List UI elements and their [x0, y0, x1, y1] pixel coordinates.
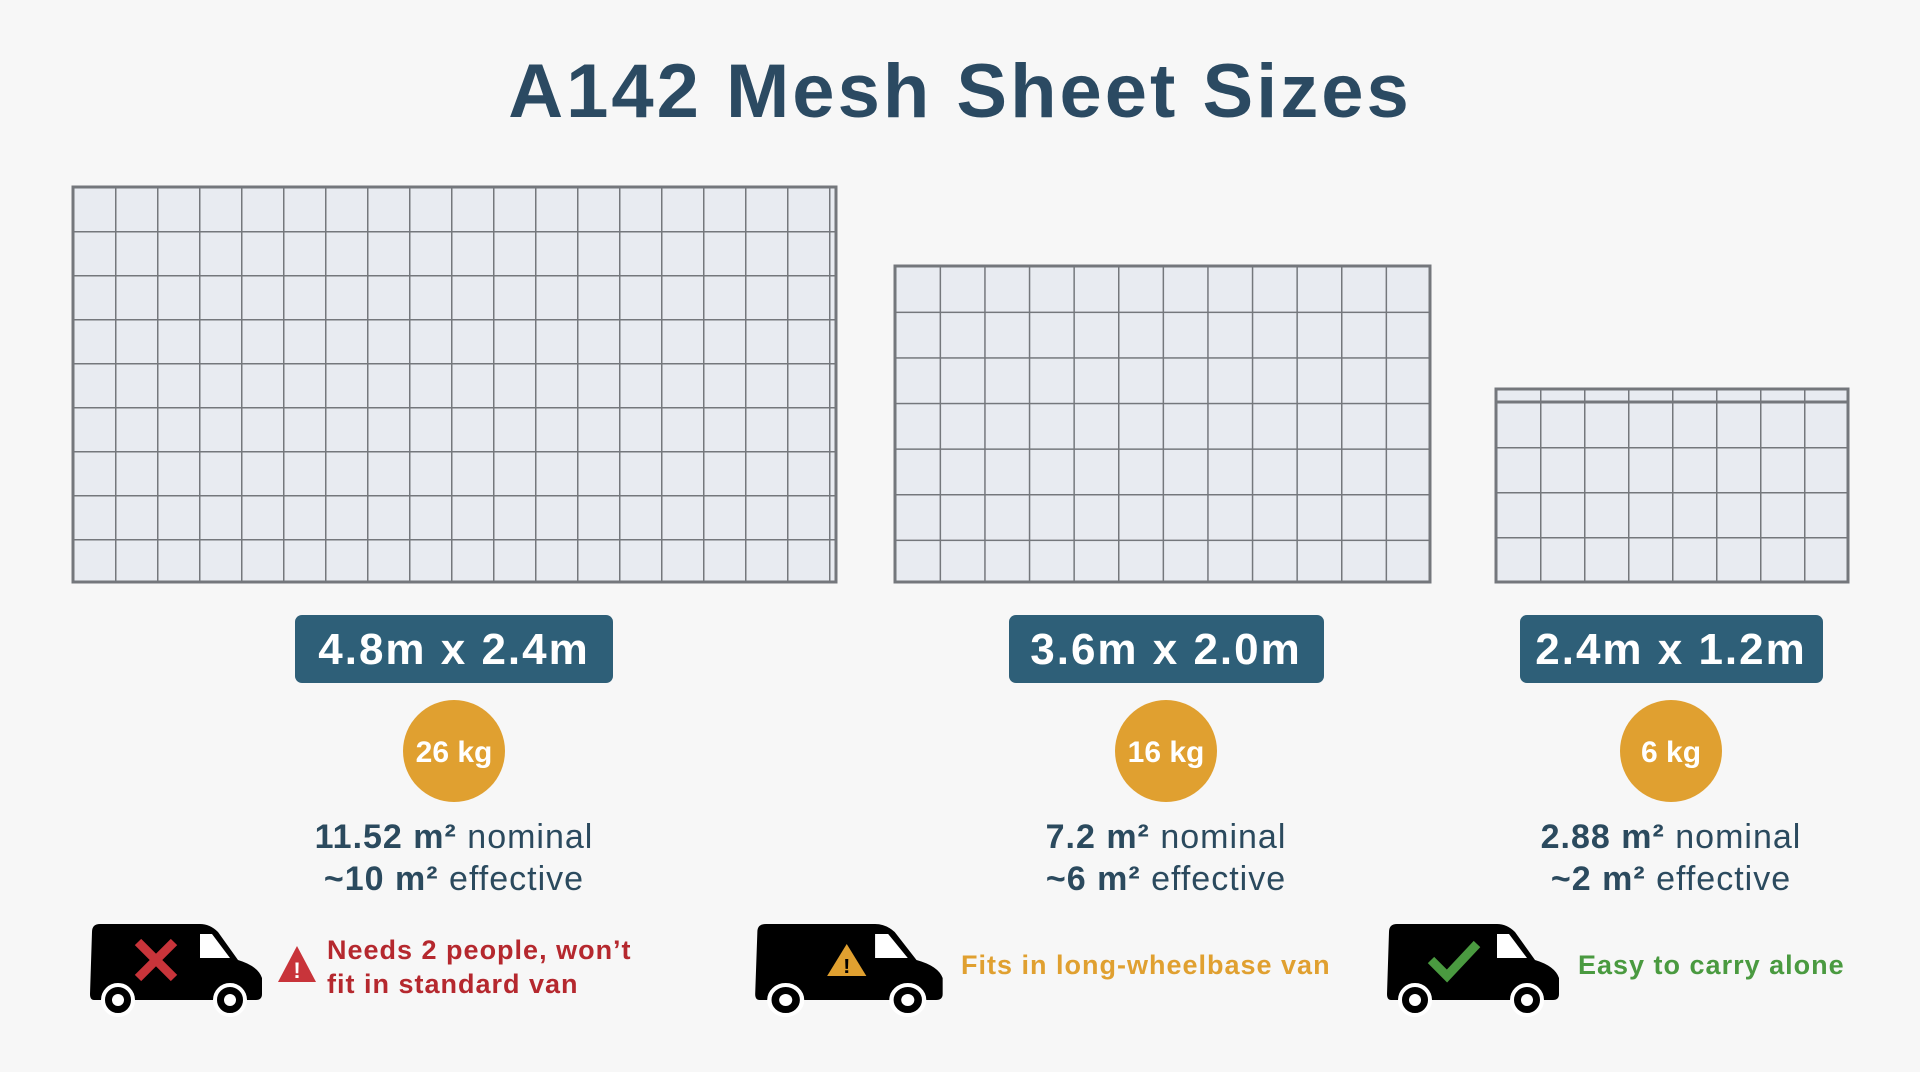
mesh sheet: 2.4m x 1.2m [1496, 389, 1848, 582]
note: needs 2 people: Needs 2 people, won’t [327, 935, 632, 965]
weight badge 6 kg: 6 kg [1641, 736, 1701, 769]
weight badge 26 kg [403, 700, 505, 802]
size label 1 [295, 615, 613, 683]
van icon with red cross [90, 924, 262, 1015]
van icon with warning: ! [843, 956, 850, 978]
size label 2: 3.6m x 2.0m [1030, 625, 1302, 674]
weight badge 16 kg: 16 kg [1128, 736, 1204, 769]
area text 3: 2.88 m² nominal [1541, 818, 1801, 856]
mesh sheet: 4.8m x 2.4m [73, 187, 836, 582]
title: A142 Mesh Sheet Sizes [508, 49, 1412, 134]
size label 3: 2.4m x 1.2m [1535, 625, 1807, 674]
warning icon red [278, 946, 316, 983]
van icon with warning [755, 924, 943, 1015]
van icon with green check [1387, 924, 1559, 1015]
area text 1: 11.52 m² nominal [315, 818, 593, 856]
size label 1: 4.8m x 2.4m [318, 625, 590, 674]
weight badge 26 kg: 26 kg [416, 736, 492, 769]
area text 2: 7.2 m² nominal [1046, 818, 1286, 856]
column 1 info [90, 615, 632, 1015]
column 2 info [755, 615, 1331, 1015]
note: long-wheelbase van: Fits in long-wheelbase van [961, 950, 1331, 980]
note: easy to carry: Easy to carry alone [1578, 950, 1845, 980]
mesh sheet: 3.6m x 2.0m [895, 266, 1430, 582]
weight badge 6 kg [1620, 700, 1722, 802]
column 3 info [1387, 615, 1845, 1015]
note: needs 2 people: fit in standard van [327, 969, 579, 999]
weight badge 16 kg [1115, 700, 1217, 802]
warning icon red: ! [293, 958, 301, 983]
size label 2 [1009, 615, 1324, 683]
area text 2: ~6 m² effective [1046, 860, 1286, 898]
size label 3 [1520, 615, 1823, 683]
area text 1: ~10 m² effective [324, 860, 584, 898]
area text 3: ~2 m² effective [1551, 860, 1791, 898]
